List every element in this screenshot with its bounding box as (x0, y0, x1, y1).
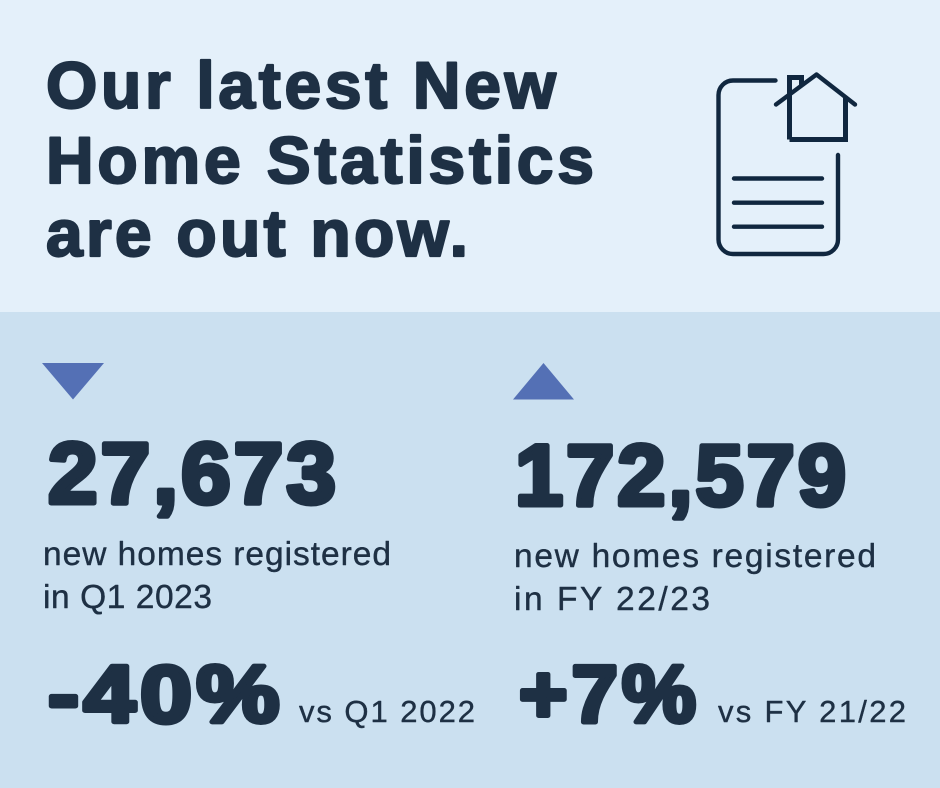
title: Our latest New (46, 48, 557, 122)
text: Q1 description (43, 536, 391, 616)
title: are out now. (46, 196, 468, 270)
change: +7%: +7% (519, 650, 700, 740)
text: vs Q1 2022: vs Q1 2022 (299, 694, 475, 729)
number: 172,579: 172,579 (515, 428, 849, 524)
icon: document with house (718, 74, 855, 254)
title (46, 48, 594, 270)
text: FY description: new homes registered (514, 538, 876, 575)
text: FY description (514, 538, 876, 618)
icon: down triangle (42, 363, 104, 400)
panel: Q1 2023 statistics (42, 363, 475, 740)
panel: FY 22/23 statistics (513, 363, 906, 740)
number: 27,673: 27,673 (48, 426, 339, 522)
text: vs FY 21/22: vs FY 21/22 (718, 694, 906, 729)
title: Home Statistics (46, 123, 594, 197)
panel: statistics background (0, 312, 940, 788)
change: -40%: -40% (48, 650, 284, 740)
text: FY description: in FY 22/23 (514, 581, 710, 618)
text: Q1 description: in Q1 2023 (43, 579, 212, 616)
text: Q1 description: new homes registered (43, 536, 391, 573)
icon: up triangle (513, 363, 574, 400)
